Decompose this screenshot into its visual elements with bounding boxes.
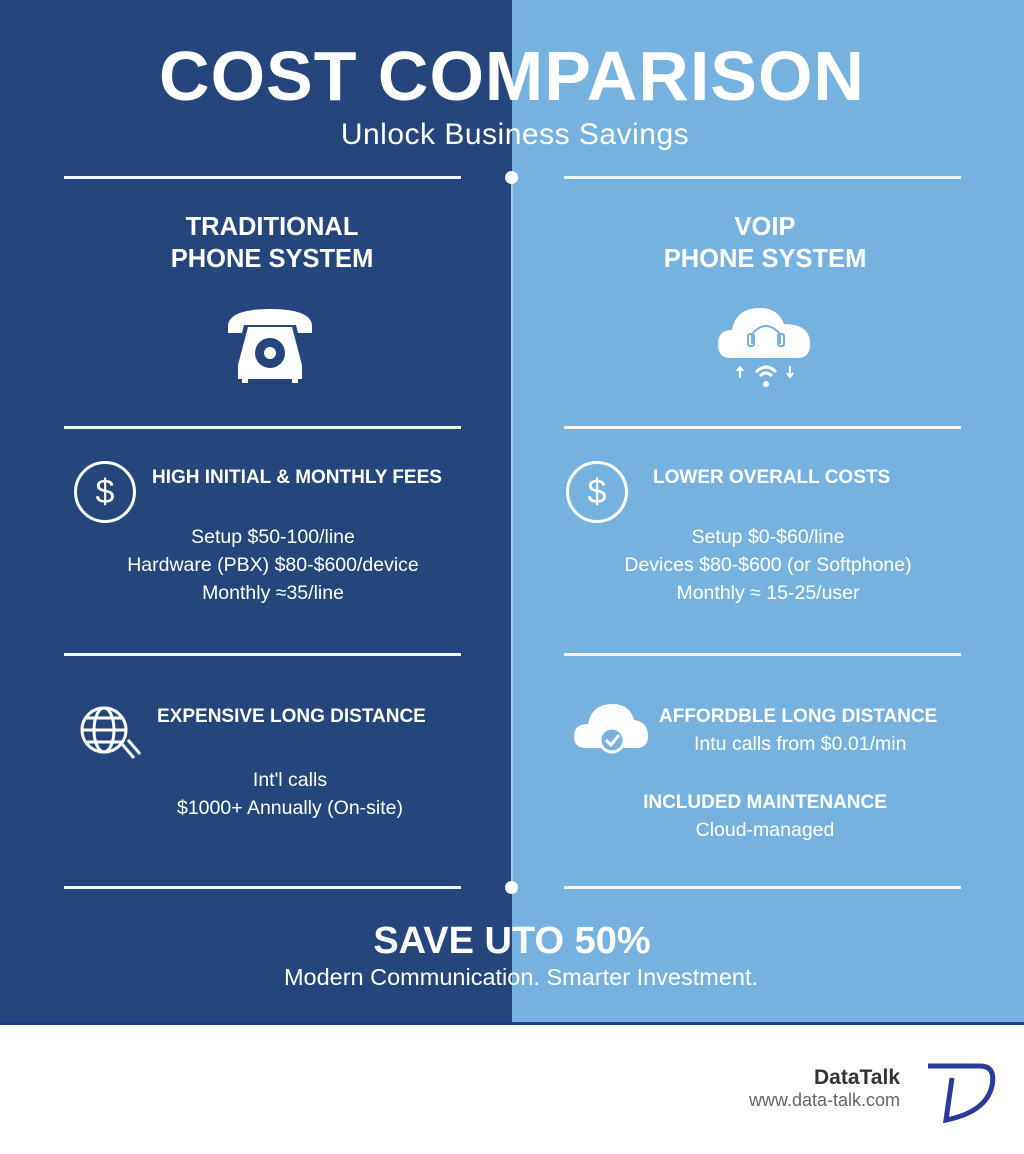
icon: globe	[80, 706, 141, 759]
icon: dollar cycle left	[74, 461, 136, 523]
text: traditional costs	[127, 526, 419, 604]
save headline: SAVE UTO 50%	[373, 920, 651, 962]
right panel background	[512, 0, 1024, 1024]
title: COST COMPARISON	[159, 37, 865, 115]
text: cloud-managed: Cloud-managed	[696, 819, 834, 841]
section: expensive long distance: EXPENSIVE LONG DISTANCE	[157, 706, 426, 727]
text: intl calls: Int'l calls	[253, 769, 327, 791]
text: voip costs: Devices $80-$600 (or Softphone)	[624, 554, 912, 576]
section: included maintenance: INCLUDED MAINTENANCE	[643, 792, 887, 813]
section: lower costs: LOWER OVERALL COSTS	[653, 467, 890, 488]
icon: dollar cycle right: $	[588, 473, 606, 511]
icon: cloud check	[574, 704, 648, 754]
section: affordable long distance: AFFORDBLE LONG DISTANCE	[659, 706, 937, 727]
text: intl calls: $1000+ Annually (On-site)	[177, 797, 403, 819]
logo	[928, 1064, 996, 1124]
text: intl calls	[177, 769, 403, 819]
footer brand: DataTalk	[814, 1066, 900, 1089]
section: high fees: HIGH INITIAL & MONTHLY FEES	[152, 467, 442, 488]
text: traditional costs: Monthly ≈35/line	[202, 582, 344, 604]
footer brand: www.data-talk.com	[749, 1090, 900, 1110]
icon: dollar cycle left: $	[96, 473, 114, 511]
tagline: Modern Communication. Smarter Investment.	[284, 964, 758, 990]
text: voip costs: Monthly ≈ 15-25/user	[676, 582, 860, 604]
icon: rotary phone	[228, 309, 312, 383]
text: intu calls: Intu calls from $0.01/min	[694, 733, 906, 755]
heading: voip: VOIP	[735, 213, 795, 241]
text: voip costs: Setup $0-$60/line	[692, 526, 844, 548]
icon: dollar cycle right	[566, 461, 628, 523]
footer brand	[749, 1066, 900, 1110]
subtitle: Unlock Business Savings	[341, 118, 689, 151]
heading: traditional: PHONE SYSTEM	[171, 245, 373, 273]
heading: traditional: TRADITIONAL	[186, 213, 358, 241]
heading: voip	[664, 213, 866, 273]
text: traditional costs: Hardware (PBX) $80-$600/device	[127, 554, 419, 576]
text: voip costs	[624, 526, 912, 604]
heading: voip: PHONE SYSTEM	[664, 245, 866, 273]
text: traditional costs: Setup $50-100/line	[191, 526, 355, 548]
icon: cloud headset	[718, 308, 810, 387]
left panel background	[0, 0, 512, 1024]
heading: traditional	[171, 213, 373, 273]
